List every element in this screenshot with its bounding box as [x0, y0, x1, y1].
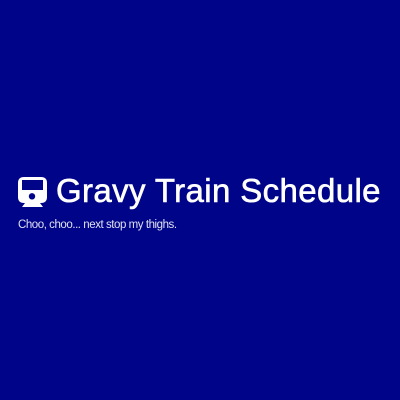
subtitle: Choo, choo... next stop my thighs.: [18, 218, 177, 230]
icon: train: [18, 177, 47, 207]
title: Gravy Train Schedule: [56, 172, 381, 209]
